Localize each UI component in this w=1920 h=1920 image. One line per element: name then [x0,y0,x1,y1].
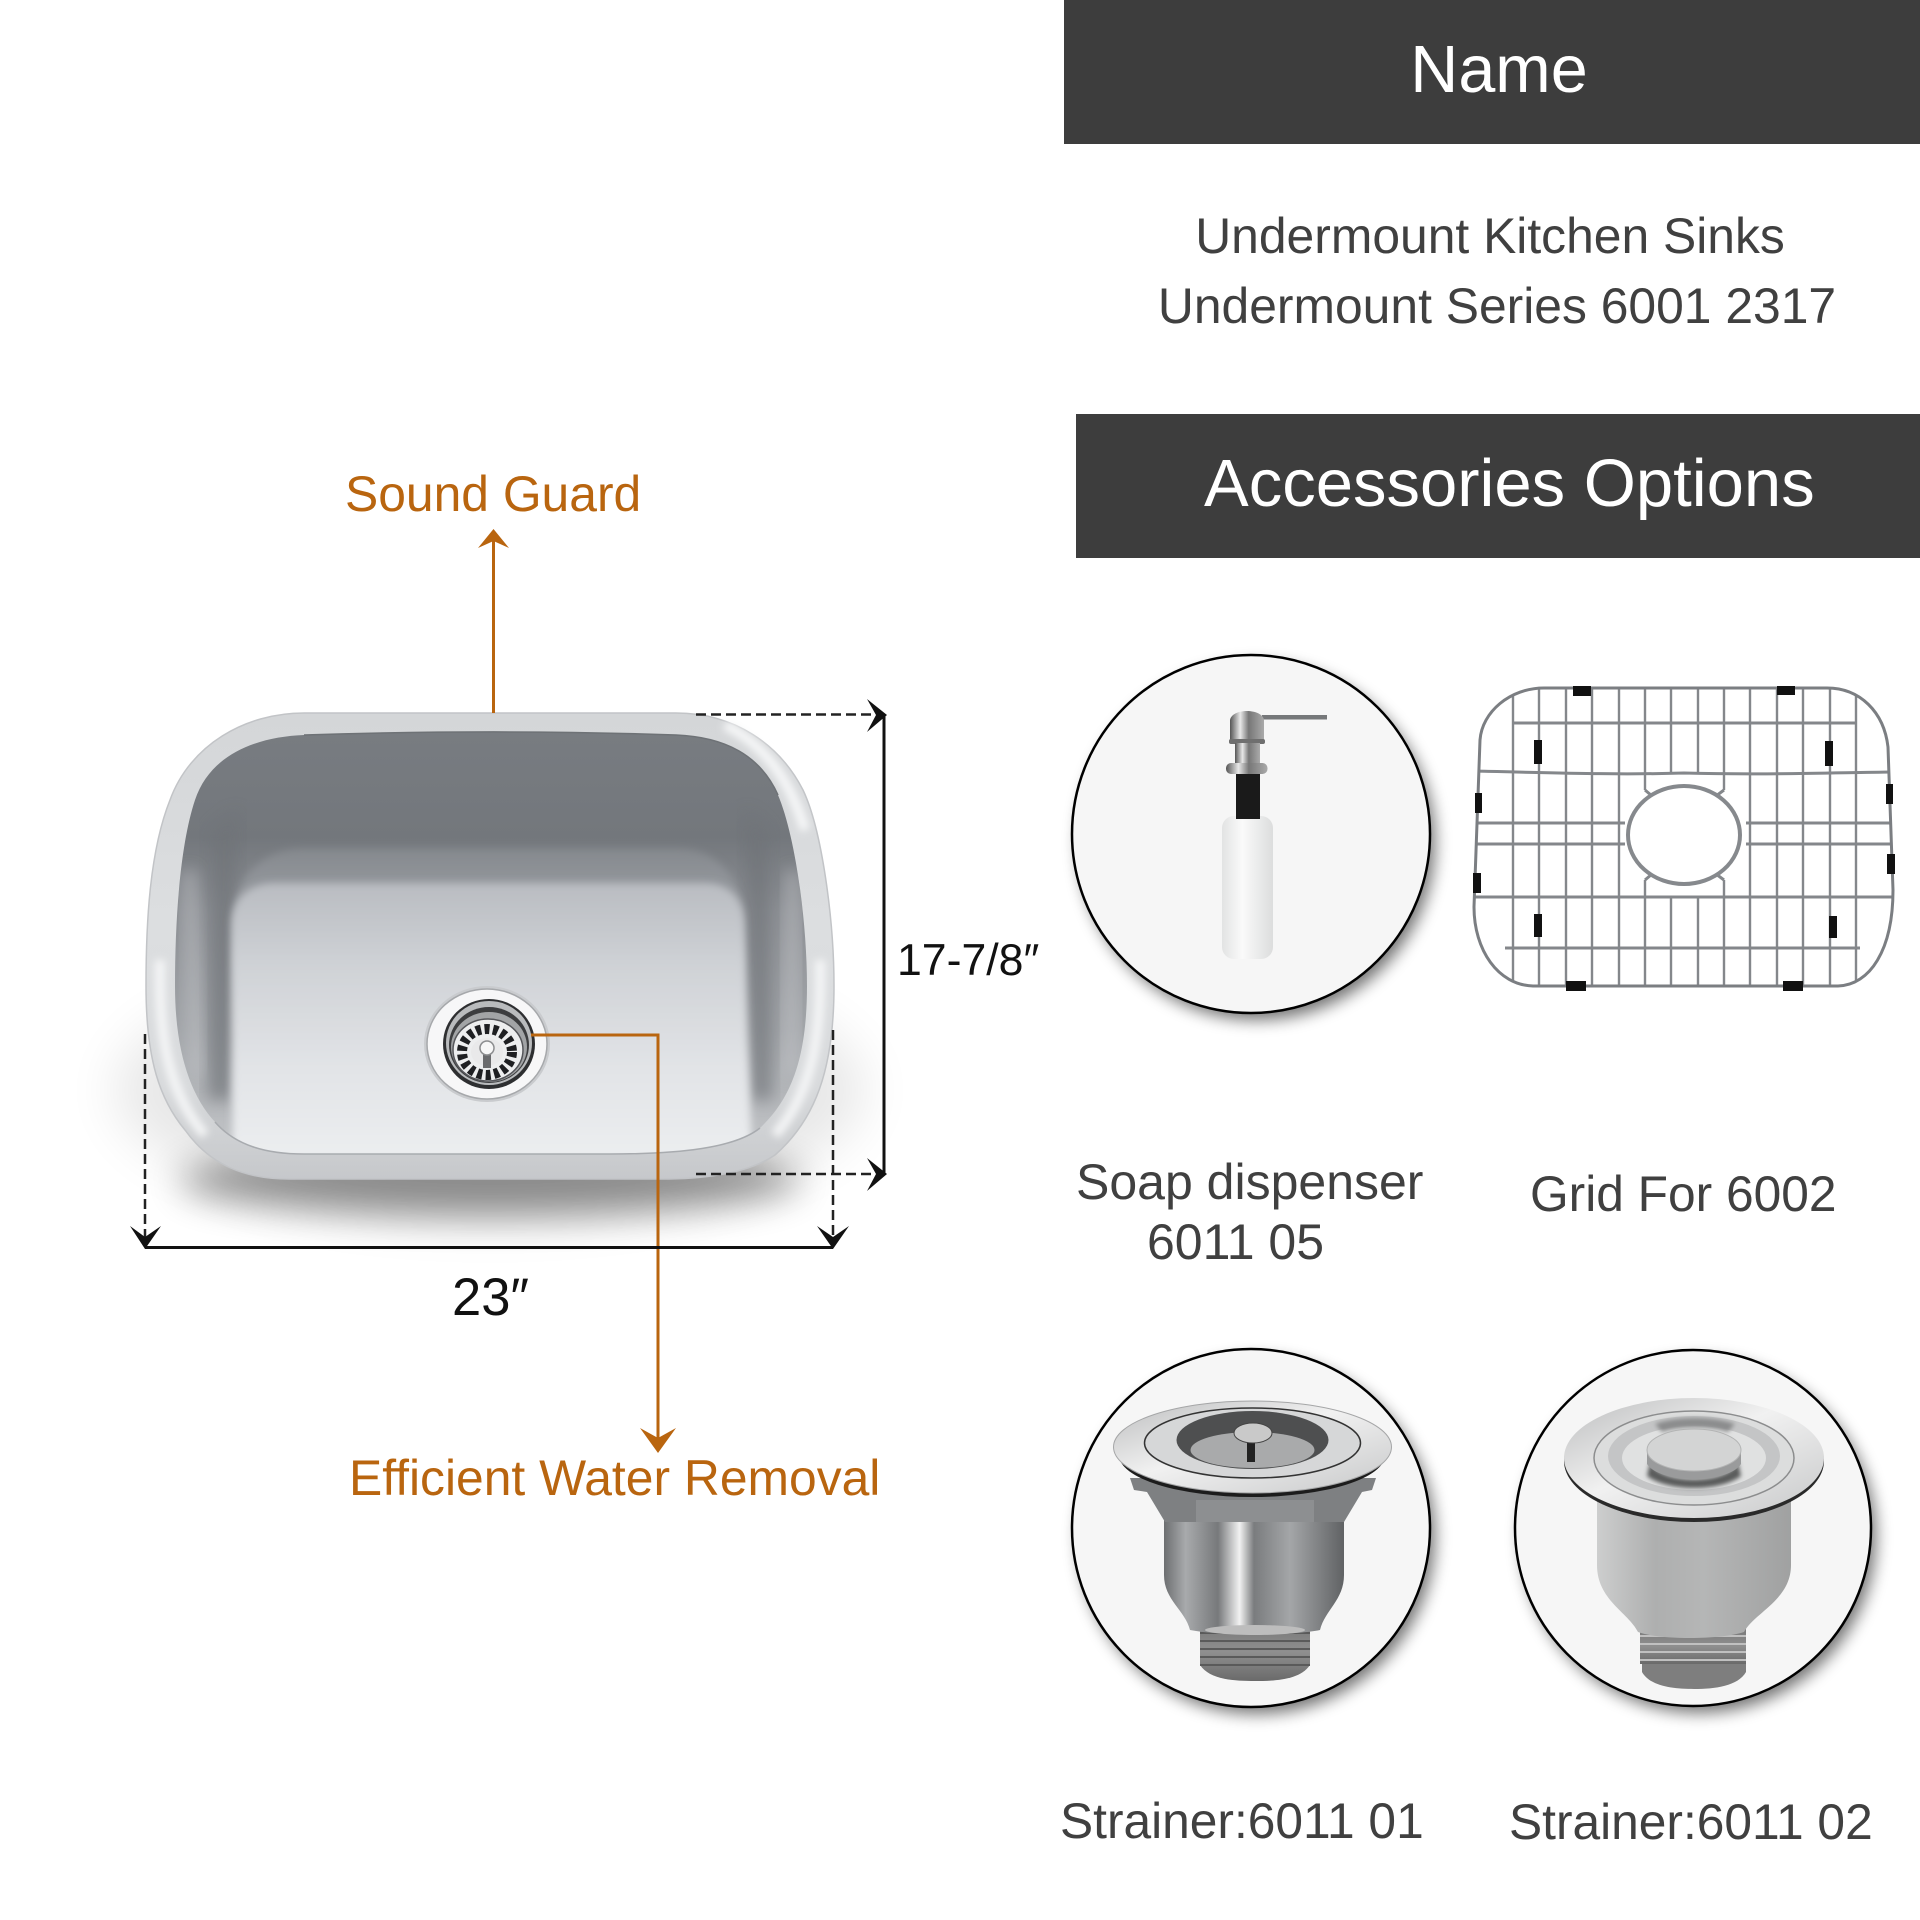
dimension: width 23 [130,1030,849,1327]
flange [1114,1401,1392,1493]
label: grid: Grid For 6002 [1530,1166,1837,1222]
grid frame [1474,688,1893,986]
sink rim [146,713,834,1179]
flange [1564,1400,1824,1522]
dimension: width 23: 23″ [452,1268,529,1327]
accessory: grid [1473,686,1895,991]
label: strainer 01: Strainer:6011 01 [1060,1793,1424,1849]
dish shadows [1655,1418,1735,1432]
label: soap dispenser: 6011 05 [1147,1214,1324,1270]
label: Efficient Water Removal: Efficient Water Removal [349,1450,880,1506]
arrow: water removal [531,1035,676,1453]
label: soap dispenser: Soap dispenser [1076,1154,1423,1210]
threads [1640,1628,1746,1664]
threaded neck [1200,1623,1310,1681]
grid drain hole [1628,786,1740,884]
ledge [232,850,739,960]
sink basin [170,730,810,1160]
product name text [1158,208,1836,334]
strainer body [1164,1510,1344,1634]
side wall shading [208,810,238,1100]
floor [232,883,752,1160]
accessory: strainer 6011 01 [1072,1349,1435,1714]
label: strainer 02: Strainer:6011 02 [1509,1794,1873,1850]
label: soap dispenser [1076,1154,1423,1270]
dimension: height 17-7/8: 17-7/8″ [897,936,1039,985]
header: Name [1064,0,1920,144]
accessory: strainer 6011 02 [1515,1350,1876,1713]
drain [424,986,550,1102]
header: Name: Name [1410,33,1588,107]
label: Sound Guard: Sound Guard [345,466,641,522]
gasket [1119,1413,1385,1497]
product name text: Undermount Series 6001 2317 [1158,278,1836,334]
accessory: soap dispenser [1072,655,1435,1020]
dispenser tube [1236,774,1260,819]
arrow: sound guard [478,529,509,713]
strainer body [1597,1490,1791,1638]
dispenser head [1226,711,1327,774]
sink product image [115,713,865,1220]
dimension: height 17-7/8 [696,699,1039,1191]
header: Accessories Options: Accessories Options [1204,446,1815,521]
dispenser bottle [1222,816,1273,959]
knob [1647,1450,1741,1479]
product name text: Undermount Kitchen Sinks [1195,208,1785,264]
neck highlight [1205,1625,1305,1635]
nut [1642,1660,1746,1689]
grid rubber bumpers [1473,686,1895,991]
header: Accessories Options [1076,414,1920,558]
plastic collar [1130,1478,1376,1522]
